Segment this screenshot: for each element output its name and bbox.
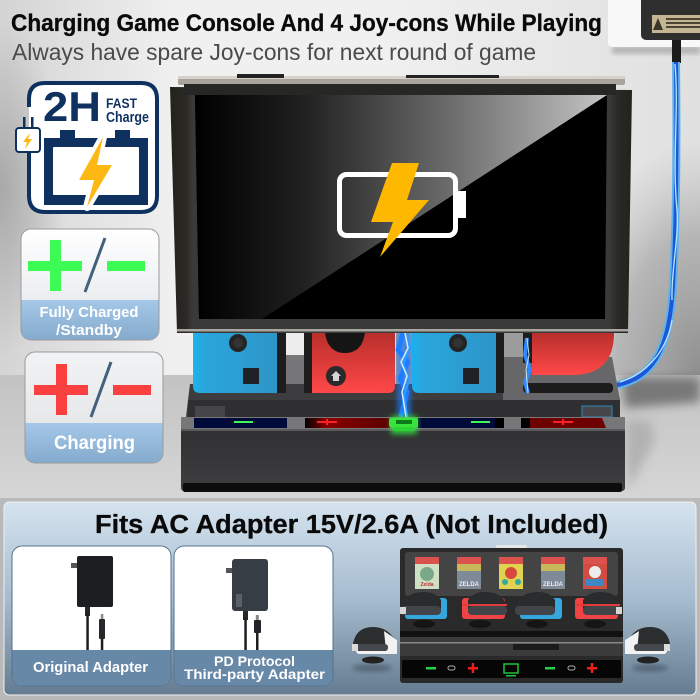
- dock front base: [181, 416, 625, 492]
- card: fully charged / standby: [21, 229, 159, 340]
- glowing blue charging cable: [617, 62, 692, 385]
- joy-con: red right: [304, 333, 395, 393]
- battery shapes: [44, 130, 148, 207]
- plug: [16, 117, 40, 152]
- card: third-party adapter: [174, 546, 333, 686]
- game console: [170, 74, 632, 333]
- green plus and minus: [28, 238, 145, 292]
- card: original adapter: [12, 546, 171, 686]
- card: third-party adapter: Third-party Adapter: [184, 666, 326, 682]
- game cards: [415, 557, 607, 589]
- wall-mounted power adapter: [608, 0, 700, 63]
- FAST label: FAST: [106, 95, 137, 111]
- side controller left: [352, 627, 397, 672]
- Charge label: Charge: [106, 110, 149, 126]
- dock upper tier with joy-con slots: [186, 333, 620, 417]
- panel: AC adapter compatibility: [0, 498, 700, 700]
- background: wall and floor: [0, 0, 700, 500]
- green glowing usb connector: [389, 416, 418, 434]
- red plus and minus: [34, 362, 151, 417]
- subtitle: Always have spare Joy-cons for next round of game: [12, 39, 536, 65]
- icon: 2H fast charge badge: [16, 83, 157, 212]
- 2H label: 2H: [43, 83, 101, 130]
- panel heading: Fits AC Adapter 15V/2.6A (Not Included): [95, 511, 608, 539]
- label text: Charging: [54, 433, 135, 454]
- battery charging icon: [340, 163, 466, 257]
- card: fully charged / standby: /Standby: [56, 322, 123, 339]
- console screen with diagonal reflection: [195, 95, 607, 319]
- title: Charging Game Console And 4 Joy-cons While Playing: [11, 10, 602, 37]
- dock product view: [400, 545, 623, 683]
- joy-con: blue left second: [412, 333, 504, 393]
- joy-con: red right second: [523, 333, 614, 375]
- icon: pd adapter: [226, 559, 268, 650]
- icon: original adapter: [71, 556, 113, 650]
- charge indicator strip: [194, 418, 606, 428]
- side controller right: [625, 627, 670, 672]
- indicator panel: [402, 660, 621, 678]
- game cards: Zelda: [420, 582, 434, 588]
- joy-con: blue left: [193, 333, 286, 393]
- game cards: ZELDA: [543, 582, 564, 588]
- lightning effects: [397, 333, 530, 417]
- label text: PD Protocol: [214, 653, 295, 669]
- mounted joy-cons: [400, 592, 622, 628]
- label text: Fully Charged: [40, 304, 138, 321]
- label text: Original Adapter: [33, 659, 148, 676]
- game cards: ZELDA: [459, 582, 480, 588]
- card: charging: [25, 352, 163, 463]
